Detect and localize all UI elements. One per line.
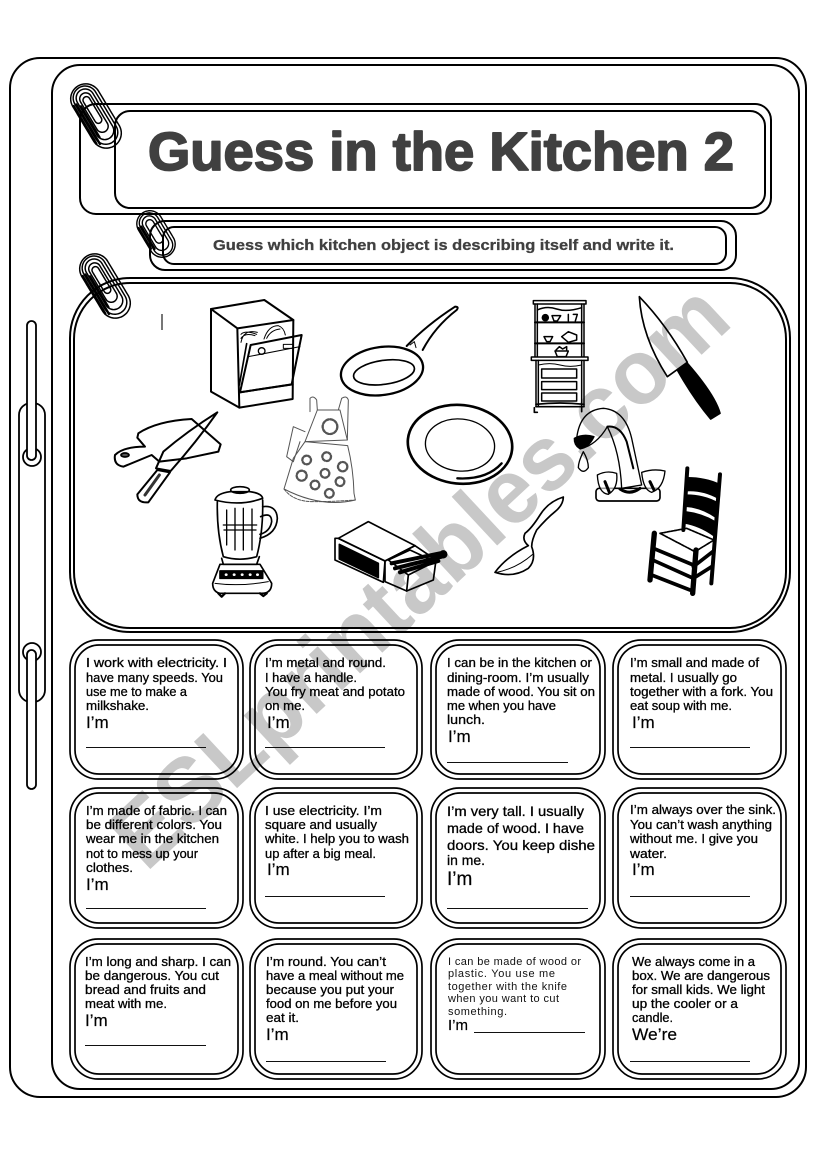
picture panel <box>70 278 790 632</box>
card: plate clue: food on me before you <box>266 996 397 1011</box>
card: plate clue: have a meal without me <box>266 968 404 983</box>
card: cupboard clue <box>431 788 605 928</box>
title panel <box>80 104 771 214</box>
card: knife clue: I’m long and sharp. I can <box>85 954 231 969</box>
card: apron clue: be different colors. You <box>86 817 222 832</box>
card: knife clue: I’m <box>85 1011 108 1030</box>
card: blender clue: use me to make a <box>86 684 188 699</box>
card: knife clue: bread and fruits and <box>85 982 206 997</box>
card: cupboard clue: I’m very tall. I usually <box>447 803 584 819</box>
card: cutting board clue: when you want to cut <box>447 993 559 1005</box>
card: cupboard clue: made of wood. I have <box>447 820 584 836</box>
paperclip: title <box>65 78 127 154</box>
card: frying pan clue <box>250 640 422 779</box>
card: faucet clue: without me. I give you <box>629 831 758 846</box>
icon: frying pan <box>338 307 458 401</box>
card: cutting board clue: I can be made of wood or <box>448 956 581 968</box>
card: cutting board clue: I’m <box>448 1017 468 1034</box>
card: chair clue: I can be in the kitchen or <box>447 655 593 670</box>
card: cutting board clue <box>431 939 605 1079</box>
card: frying pan clue: on me. <box>265 698 305 713</box>
title: Guess in the Kitchen 2 <box>148 122 734 182</box>
icon: china cabinet <box>531 301 588 412</box>
icon: dishwasher <box>211 300 302 408</box>
card: faucet clue: You can’t wash anything <box>630 817 772 832</box>
card: cupboard clue: doors. You keep dishe <box>447 837 595 853</box>
card: spoon clue: together with a fork. You <box>630 684 773 699</box>
card: chair clue: I’m <box>448 727 471 746</box>
card: faucet clue <box>613 788 786 928</box>
card: matches clue: box. We are dangerous <box>632 968 771 983</box>
card: dishwasher clue <box>250 788 422 928</box>
card: faucet clue: I’m always over the sink. <box>630 802 776 817</box>
card: cutting board clue: something. <box>448 1006 507 1018</box>
card: frying pan clue: You fry meat and potato <box>265 684 405 699</box>
card: frying pan clue: I’m <box>267 713 290 732</box>
paperclip: pictures <box>74 248 136 324</box>
card: plate clue: I’m round. You can’t <box>266 954 386 969</box>
card: dishwasher clue: square and usually <box>265 817 378 832</box>
card: frying pan clue: I’m metal and round. <box>265 655 386 670</box>
card: apron clue: I’m <box>86 875 109 894</box>
icon: faucet <box>574 408 665 501</box>
card: knife clue: be dangerous. You cut <box>85 968 219 983</box>
card: dishwasher clue: white. I help you to wash <box>264 831 409 846</box>
card: chair clue: made of wood. You sit on <box>447 684 595 699</box>
card: plate clue: because you put your <box>266 982 395 997</box>
card: faucet clue: water. <box>629 846 667 861</box>
card: blender clue <box>70 640 243 779</box>
card: faucet clue: I’m <box>632 860 655 879</box>
card: frying pan clue: I have a handle. <box>265 670 357 685</box>
card: blender clue: I’m <box>86 713 109 732</box>
card: spoon clue: eat soup with me. <box>630 698 732 713</box>
icon: cutting board and knife <box>115 412 221 502</box>
card: dishwasher clue: I use electricity. I’m <box>265 803 382 818</box>
card: dishwasher clue: I’m <box>267 860 290 879</box>
stray mark <box>161 314 163 330</box>
icon: apron <box>284 397 355 503</box>
card: spoon clue: I’m <box>632 713 655 732</box>
instruction text: Guess which kitchen object is describing itself and write it. <box>213 237 674 254</box>
card: knife clue <box>70 939 243 1079</box>
paperclip: instruction <box>132 206 180 262</box>
card: cupboard clue: I’m <box>447 869 472 890</box>
instruction panel <box>150 221 736 270</box>
card: apron clue <box>70 788 243 928</box>
binder rings <box>19 321 45 789</box>
card: blender clue: have many speeds. You <box>86 670 223 685</box>
card: blender clue: milkshake. <box>86 698 149 713</box>
card: cupboard clue: in me. <box>447 852 485 868</box>
card: apron clue: wear me in the kitchen <box>85 831 219 846</box>
card: chair clue <box>431 640 605 779</box>
card: chair clue: dining-room. I’m usually <box>447 670 590 685</box>
card: chair clue: me when you have <box>447 698 556 713</box>
card: knife clue: meat with me. <box>85 996 167 1011</box>
card: cutting board clue: together with the knife <box>448 981 567 993</box>
icon: blender <box>213 487 277 597</box>
card: matches clue: for small kids. We light <box>632 982 765 997</box>
card: matches clue: We’re <box>632 1025 677 1044</box>
watermark: ESLprintables.com <box>90 264 748 888</box>
card: spoon clue: I’m small and made of <box>630 655 759 670</box>
card: dishwasher clue: up after a big meal. <box>265 846 376 861</box>
card: matches clue: We always come in a <box>632 954 756 969</box>
card: plate clue: eat it. <box>266 1010 299 1025</box>
card: spoon clue <box>613 640 786 779</box>
icon: ladder-back chair <box>650 468 720 593</box>
icon: chef knife <box>639 297 720 419</box>
card: apron clue: clothes. <box>86 860 133 875</box>
card: chair clue: lunch. <box>447 712 485 727</box>
card: cutting board clue: plastic. You use me <box>448 968 555 980</box>
card: plate clue: I’m <box>266 1025 289 1044</box>
card: apron clue: I’m made of fabric. I can <box>86 803 227 818</box>
card: matches clue: candle. <box>632 1010 673 1025</box>
card: blender clue: I work with electricity. I <box>86 655 227 670</box>
card: matches clue: up the cooler or a <box>632 996 739 1011</box>
icon: spoon <box>495 497 563 575</box>
card: matches clue <box>613 939 786 1079</box>
card: spoon clue: metal. I usually go <box>630 670 737 685</box>
card: apron clue: not to mess up your <box>86 846 199 861</box>
icon: plate <box>404 400 516 489</box>
icon: matchbox <box>335 522 447 591</box>
card: plate clue <box>250 939 422 1079</box>
